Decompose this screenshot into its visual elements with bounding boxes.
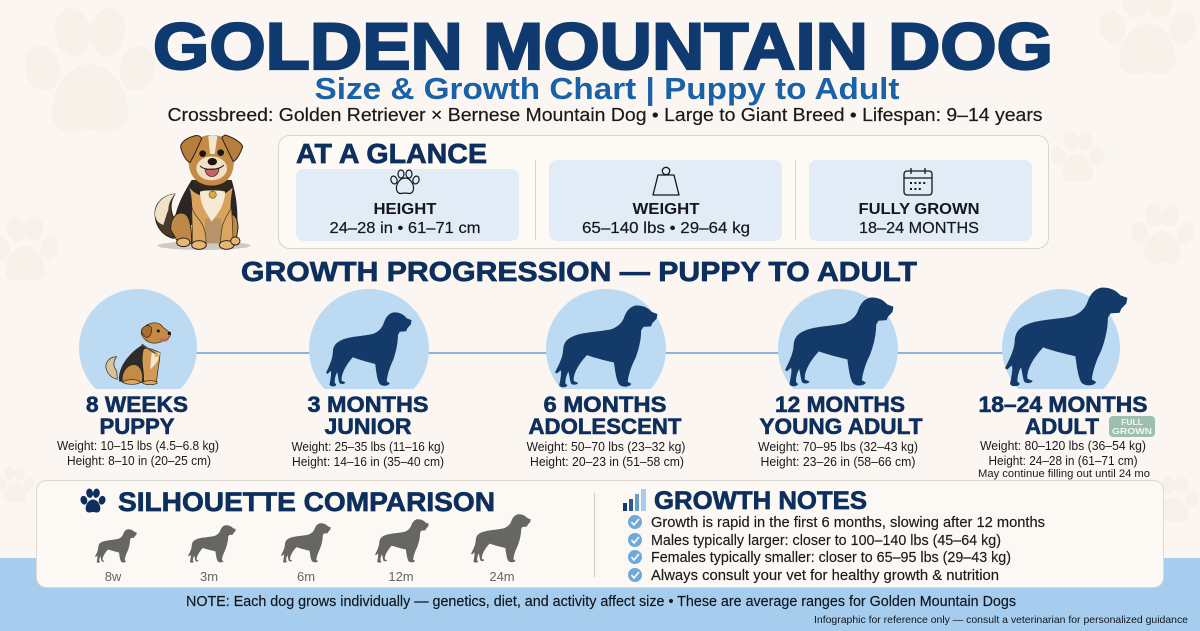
heading: at a glance: AT A GLANCE [296, 138, 487, 169]
stage heading: JUNIOR [324, 414, 412, 439]
stage heading [978, 392, 1148, 439]
stage: 12 months [758, 289, 923, 469]
stage details [57, 439, 219, 468]
icon: calendar [904, 168, 932, 195]
heading: growth progression: GROWTH PROGRESSION — PUPPY TO ADULT [241, 256, 917, 287]
note lines: Males typically larger: closer to 100–140 lbs (45–64 kg) [651, 533, 1001, 549]
circle [309, 289, 429, 389]
circle [778, 289, 898, 389]
stage heading: 12 MONTHS [775, 392, 905, 417]
timeline connector [190, 352, 1010, 354]
heading: growth notes: GROWTH NOTES [654, 487, 867, 515]
silhouette [555, 305, 657, 387]
card: weight [549, 160, 782, 241]
stage details [292, 440, 444, 469]
stage details: May continue filling out until 24 mo [978, 468, 1150, 480]
stage heading: YOUNG ADULT [760, 414, 923, 439]
stage details: Height: 8–10 in (20–25 cm) [67, 454, 211, 468]
note lines: Growth is rapid in the first 6 months, slowing after 12 months [651, 515, 1045, 531]
icon: paw [79, 488, 107, 513]
stage details [526, 440, 686, 469]
stage details: Weight: 10–15 lbs (4.5–6.8 kg) [57, 439, 219, 453]
illustration: puppy [106, 323, 171, 385]
icon: growth bars [623, 489, 646, 511]
stage: 3 months [292, 289, 444, 469]
card: fully grown [809, 160, 1032, 241]
disclaimer: Infographic for reference only — consult a veterinarian for personalized guidance [814, 614, 1188, 626]
stage heading: ADULT [1025, 414, 1100, 439]
note line: NOTE: Each dog grows individually — genetics, diet, and activity affect size • These are average ranges for Golden Mountain Dogs [186, 594, 1016, 610]
stage heading [308, 392, 428, 439]
comparison labels [105, 569, 515, 584]
stage heading: PUPPY [100, 414, 175, 439]
value: fully grown: 18–24 MONTHS [859, 220, 979, 237]
badge: full grown: GROWN [1112, 426, 1152, 436]
heading: silhouette comparison: SILHOUETTE COMPARISON [118, 487, 495, 517]
stage heading: 6 MONTHS [544, 392, 666, 417]
badge: full grown: FULL [1121, 417, 1143, 427]
note lines: Females typically smaller: closer to 65–95 lbs (29–43 kg) [651, 550, 1011, 566]
comparison labels: 8w [105, 569, 122, 584]
stage heading [760, 392, 923, 439]
circle [546, 289, 666, 389]
stage details: Weight: 25–35 lbs (11–16 kg) [292, 440, 444, 454]
check icons [628, 515, 642, 582]
stage heading: 3 MONTHS [308, 392, 428, 417]
divider right [795, 160, 796, 240]
breed summary line: Crossbreed: Golden Retriever × Bernese Mountain Dog • Large to Giant Breed • Lifespan: 9–14 years [168, 104, 1042, 125]
label: height: HEIGHT [374, 201, 437, 218]
icon: kettle weight [653, 167, 679, 195]
stage heading: 18–24 MONTHS [978, 392, 1148, 417]
stage heading [86, 392, 188, 439]
comparison labels: 6m [297, 569, 315, 584]
stage: 6 months [526, 289, 686, 469]
value: weight: 65–140 lbs • 29–64 kg [582, 220, 750, 237]
stage details: Weight: 50–70 lbs (23–32 kg) [526, 440, 686, 454]
card: height [296, 169, 519, 241]
illustration: sitting golden mountain dog [155, 135, 251, 250]
panel: at a glance [278, 136, 1048, 248]
stage details: Weight: 80–120 lbs (36–54 kg) [980, 439, 1146, 453]
label: weight: WEIGHT [632, 201, 700, 218]
stage heading: 8 WEEKS [86, 392, 188, 417]
stage heading [528, 392, 682, 439]
stage details: Height: 23–26 in (58–66 cm) [760, 455, 916, 469]
circle [79, 289, 197, 389]
divider left [535, 160, 536, 240]
note lines: Always consult your vet for healthy growth & nutrition [651, 568, 999, 584]
growth notes list [628, 515, 1045, 584]
panel: silhouette comparison and growth notes [36, 480, 1164, 588]
comparison labels: 24m [489, 569, 515, 584]
comparison labels: 3m [200, 569, 218, 584]
value: height: 24–28 in • 61–71 cm [330, 220, 480, 237]
title: GOLDEN MOUNTAIN DOG [153, 9, 1053, 83]
subtitle: Size & Growth Chart | Puppy to Adult [314, 71, 900, 106]
label: fully grown: FULLY GROWN [858, 201, 980, 218]
bottom blue band [0, 558, 1200, 631]
stage details: Height: 20–23 in (51–58 cm) [530, 455, 684, 469]
icon: paw outline [390, 170, 420, 194]
stage: 18-24 months [978, 288, 1155, 480]
stage details: Height: 24–28 in (61–71 cm) [988, 454, 1138, 468]
stage details: Height: 14–16 in (35–40 cm) [292, 455, 444, 469]
badge: full grown [1109, 416, 1155, 437]
comparison silhouettes [95, 514, 531, 563]
stage heading: ADOLESCENT [528, 414, 682, 439]
stage details: Weight: 70–95 lbs (32–43 kg) [758, 440, 918, 454]
silhouette [1005, 288, 1127, 386]
comparison labels: 12m [388, 569, 414, 584]
silhouette [785, 298, 893, 386]
note lines [651, 515, 1045, 584]
circle [1002, 289, 1120, 389]
stage details [978, 439, 1150, 480]
divider [594, 493, 595, 577]
stage: 8 weeks [57, 289, 219, 468]
silhouette [326, 312, 412, 386]
stage details [758, 440, 918, 469]
